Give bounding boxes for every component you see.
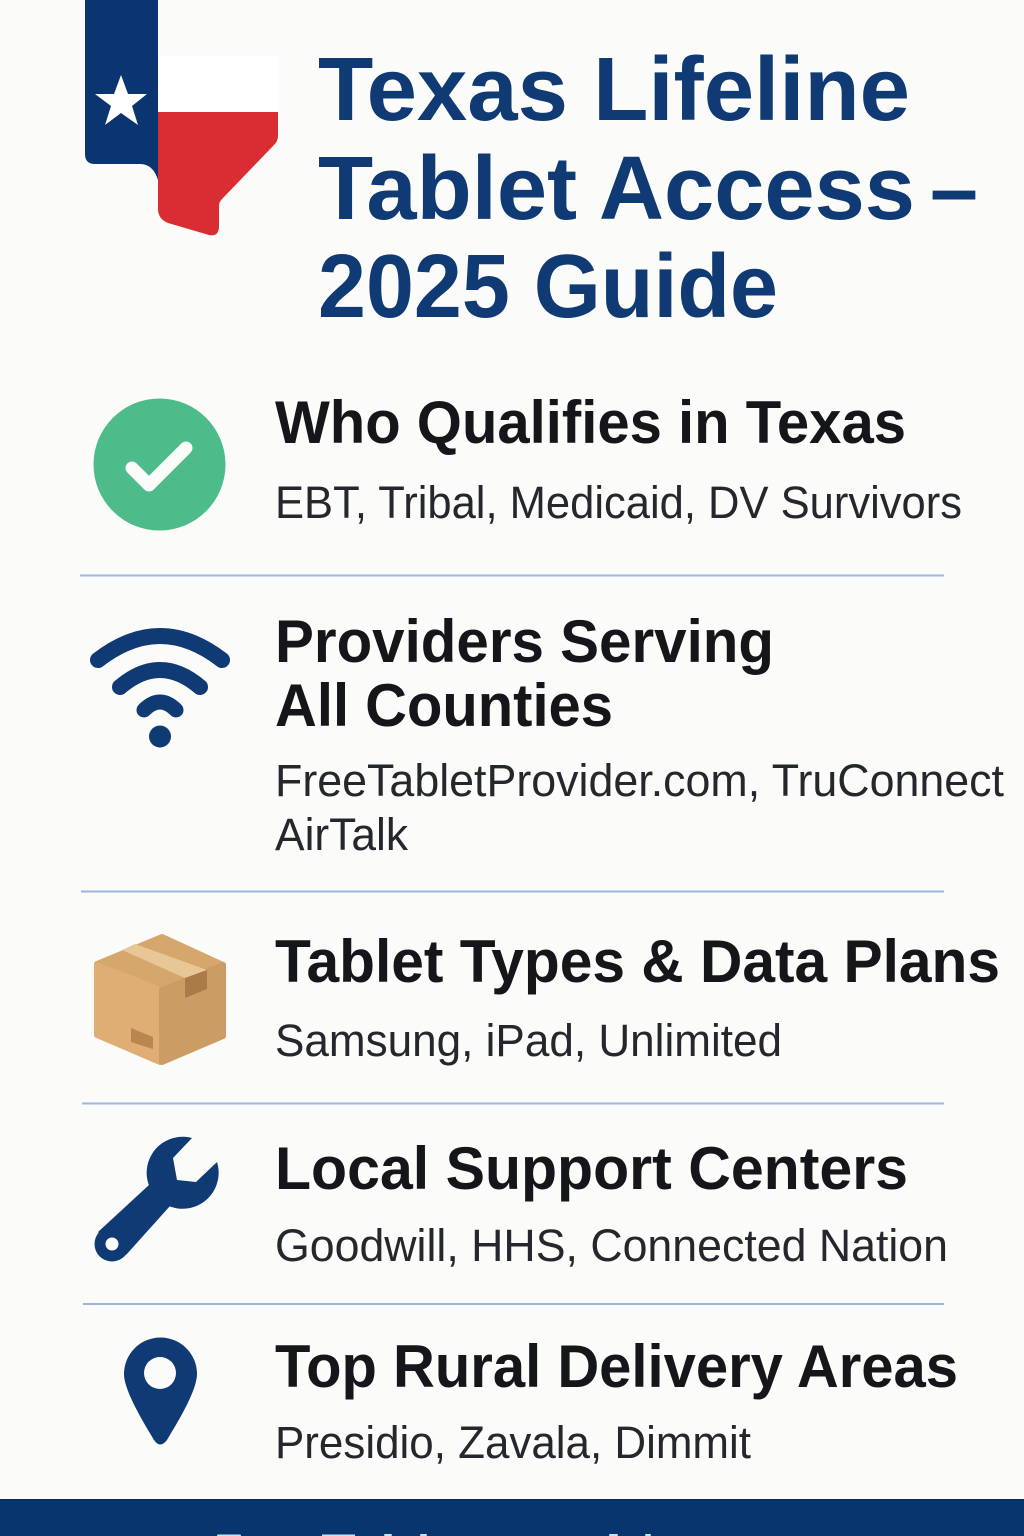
title: Tablet Access (318, 139, 915, 239)
icon: cardboard box (97, 937, 223, 1062)
title (318, 40, 978, 337)
panel: providers (98, 608, 1004, 860)
heading: who qualifies: Who Qualifies in Texas (275, 389, 906, 456)
text: provider names: AirTalk (275, 809, 408, 860)
text: tablet options: Samsung, iPad, Unlimited (275, 1015, 782, 1066)
icon: green check circle (94, 398, 226, 530)
panel: tablet types (97, 928, 1000, 1066)
title: – (930, 139, 978, 239)
text: provider names: FreeTabletProvider.com, TruConnect (275, 755, 1004, 806)
panel: local support (94, 1135, 948, 1271)
icon: wrench (94, 1137, 219, 1262)
icon: Texas flag map (85, 0, 279, 235)
text: delivery counties: Presidio, Zavala, Dimmit (275, 1417, 751, 1468)
title: Texas Lifeline (318, 40, 910, 140)
heading: local support: Local Support Centers (275, 1135, 908, 1202)
text: provider names (275, 755, 1004, 860)
text: support organizations: Goodwill, HHS, Connected Nation (275, 1220, 948, 1271)
heading: tablet types: Tablet Types & Data Plans (275, 928, 1000, 995)
icon: wifi signal (98, 636, 222, 748)
panel: who qualifies (94, 389, 962, 530)
heading: rural delivery: Top Rural Delivery Areas (275, 1333, 958, 1400)
heading: providers: Providers Serving (275, 608, 774, 675)
panel: rural delivery (124, 1333, 958, 1468)
footer band (0, 1499, 1024, 1536)
text: qualifying programs: EBT, Tribal, Medicaid, DV Survivors (275, 477, 962, 528)
heading: providers (275, 608, 774, 739)
heading: providers: All Counties (275, 672, 613, 739)
title: 2025 Guide (318, 237, 778, 337)
icon: map pin (124, 1338, 197, 1444)
